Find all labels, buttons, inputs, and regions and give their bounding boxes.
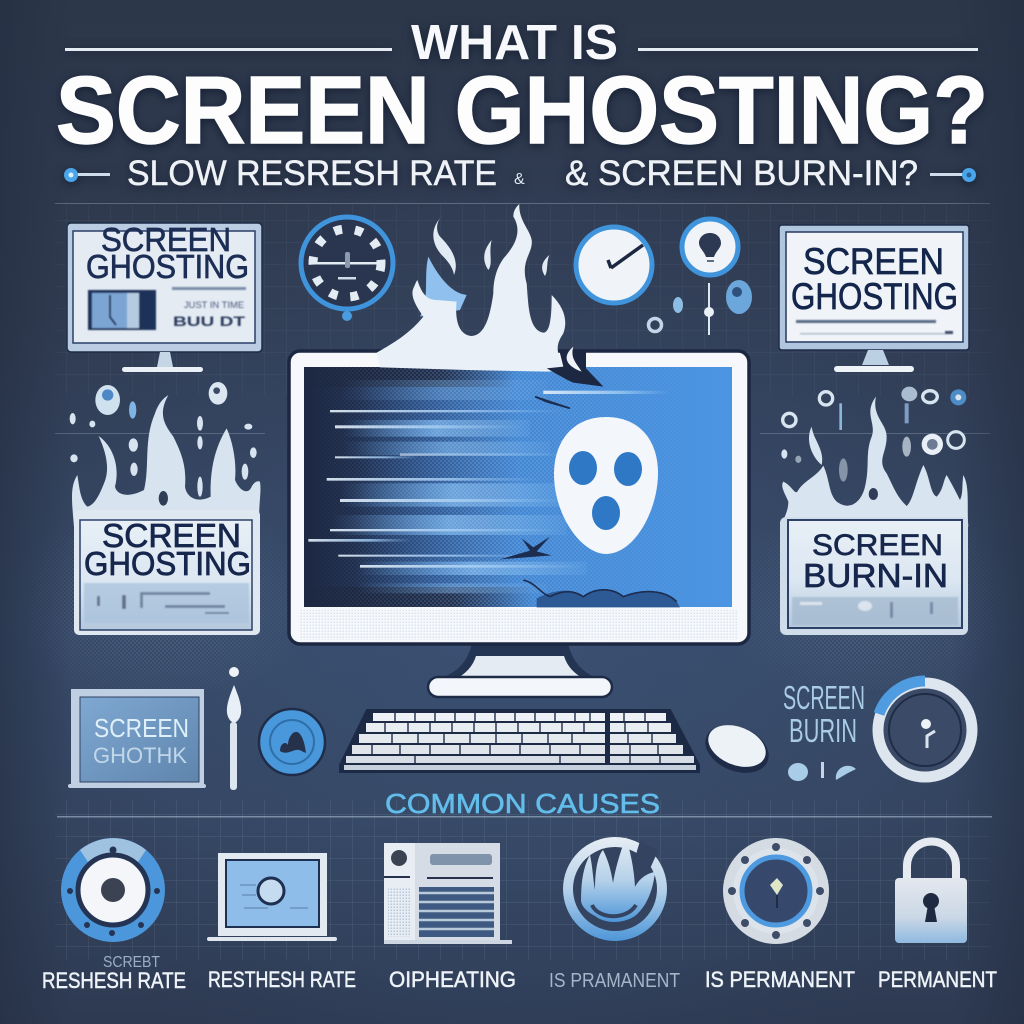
- smeared caption: [796, 320, 953, 334]
- flame above central monitor: [377, 204, 603, 387]
- ghost eye left: [569, 451, 597, 485]
- panel: small laptop: [68, 689, 206, 788]
- blurred caption: BUU DT: [173, 313, 246, 329]
- heading: screen ghosting: SCREEN GHOSTING?: [56, 57, 988, 164]
- icon: refresh dial: [61, 838, 165, 942]
- icon: clock: [576, 227, 652, 303]
- monitor subheading: GHOSTING: [86, 248, 249, 285]
- screen: [304, 367, 732, 607]
- causes row: [42, 837, 997, 993]
- subtitle marker right: [930, 168, 976, 182]
- small marks: [788, 762, 856, 781]
- ghosting streaks: [308, 380, 670, 593]
- floating ring: [783, 391, 937, 427]
- white flame body: [377, 204, 565, 372]
- title block: [56, 16, 988, 193]
- subtitle separator: &: [514, 171, 525, 188]
- droplet: [673, 297, 683, 313]
- droplet: [129, 401, 136, 419]
- screen dark edges: [304, 367, 534, 607]
- blurred caption: [792, 597, 958, 625]
- label line one: SCREEN: [783, 679, 865, 716]
- icon: burn ring: [878, 681, 972, 777]
- monitor heading: SCREEN: [101, 221, 231, 258]
- screen subheading: BURN-IN: [803, 557, 948, 594]
- small caption above first label: SCREBT: [103, 954, 160, 971]
- flame wisp: [433, 215, 456, 275]
- key gaps: [372, 713, 660, 763]
- heading: common causes: COMMON CAUSES: [385, 788, 660, 819]
- subtitle left: SLOW RESRESH RATE: [127, 154, 497, 193]
- blue flame: [420, 257, 467, 317]
- panel: left flaming screen: [70, 382, 260, 635]
- keyboard: [340, 710, 699, 772]
- icon: light bulb: [682, 219, 738, 275]
- icon: pin: [227, 667, 241, 790]
- flames: [70, 382, 260, 527]
- cause label: overheating: OIPHEATING: [389, 967, 516, 992]
- label line two: BURIN: [789, 712, 857, 749]
- blurred caption: JUST IN TIME: [184, 300, 244, 310]
- frame gap behind wisp: [547, 351, 603, 387]
- ghost eye right: [614, 452, 642, 486]
- subtitle right: & SCREEN BURN-IN?: [565, 154, 918, 193]
- floating symbol: [95, 385, 120, 415]
- icon: top gauge: [301, 217, 393, 321]
- cause label: refresh rate two: RESTHESH RATE: [208, 967, 356, 992]
- floating symbol: [839, 387, 966, 430]
- droplet lock: [726, 280, 752, 314]
- icon: small blue badge: [259, 709, 325, 775]
- monitor heading: SCREEN: [803, 241, 944, 282]
- screen heading: SCREEN: [812, 529, 943, 562]
- thumbnail: [88, 290, 156, 330]
- floating symbol: [209, 382, 227, 405]
- screen frame: [74, 510, 260, 635]
- flame wisp: [484, 240, 492, 270]
- cause label: is permanent blurred: IS PRAMANENT: [549, 970, 680, 992]
- icon: flame swirl: [563, 837, 667, 941]
- icon: laptop: [207, 853, 337, 941]
- subtitle marker left: [64, 168, 110, 182]
- screen subheading: GHOSTING: [84, 545, 251, 582]
- section divider: [57, 816, 992, 818]
- decorative symbols near icons: [648, 280, 752, 335]
- screen heading: SCREEN: [102, 517, 241, 554]
- heading rule left: [65, 48, 392, 51]
- floating ring large: [922, 432, 964, 455]
- blurred caption: [84, 583, 249, 623]
- mouse: [698, 716, 776, 782]
- cause label: permanent: PERMANENT: [878, 967, 997, 992]
- screen frame: [780, 517, 968, 635]
- stand: [428, 643, 612, 697]
- cause label: refresh rate one: RESHESH RATE: [42, 968, 186, 993]
- ghost face: [554, 417, 658, 554]
- flame wisp near frame: [567, 347, 582, 372]
- key rows: [346, 713, 694, 763]
- panel: right flaming screen: [780, 387, 968, 635]
- monitor subheading: GHOSTING: [791, 276, 958, 317]
- small ring: [648, 318, 662, 332]
- heading rule right: [638, 48, 978, 51]
- ghost mouth: [592, 496, 620, 530]
- panel: top-right monitor: [779, 225, 969, 372]
- panel: screen burn label: [783, 679, 865, 781]
- flames: [780, 387, 968, 527]
- laptop heading: SCREEN: [94, 713, 189, 743]
- panel: top-left monitor: [67, 221, 262, 372]
- icon: permanence ring: [728, 843, 824, 939]
- pin marker: [704, 283, 714, 335]
- heading: what is: WHAT IS: [411, 16, 618, 70]
- flame wisp: [542, 255, 549, 276]
- screen cracks: [500, 397, 680, 607]
- laptop subheading: GHOTHK: [93, 743, 187, 768]
- icon: server: [384, 843, 512, 944]
- monitor frame: [289, 351, 749, 644]
- cause label: is permanent: IS PERMANENT: [705, 967, 855, 992]
- panel: central monitor: [289, 351, 749, 697]
- icon: padlock: [895, 842, 967, 943]
- blurred caption: [172, 287, 246, 329]
